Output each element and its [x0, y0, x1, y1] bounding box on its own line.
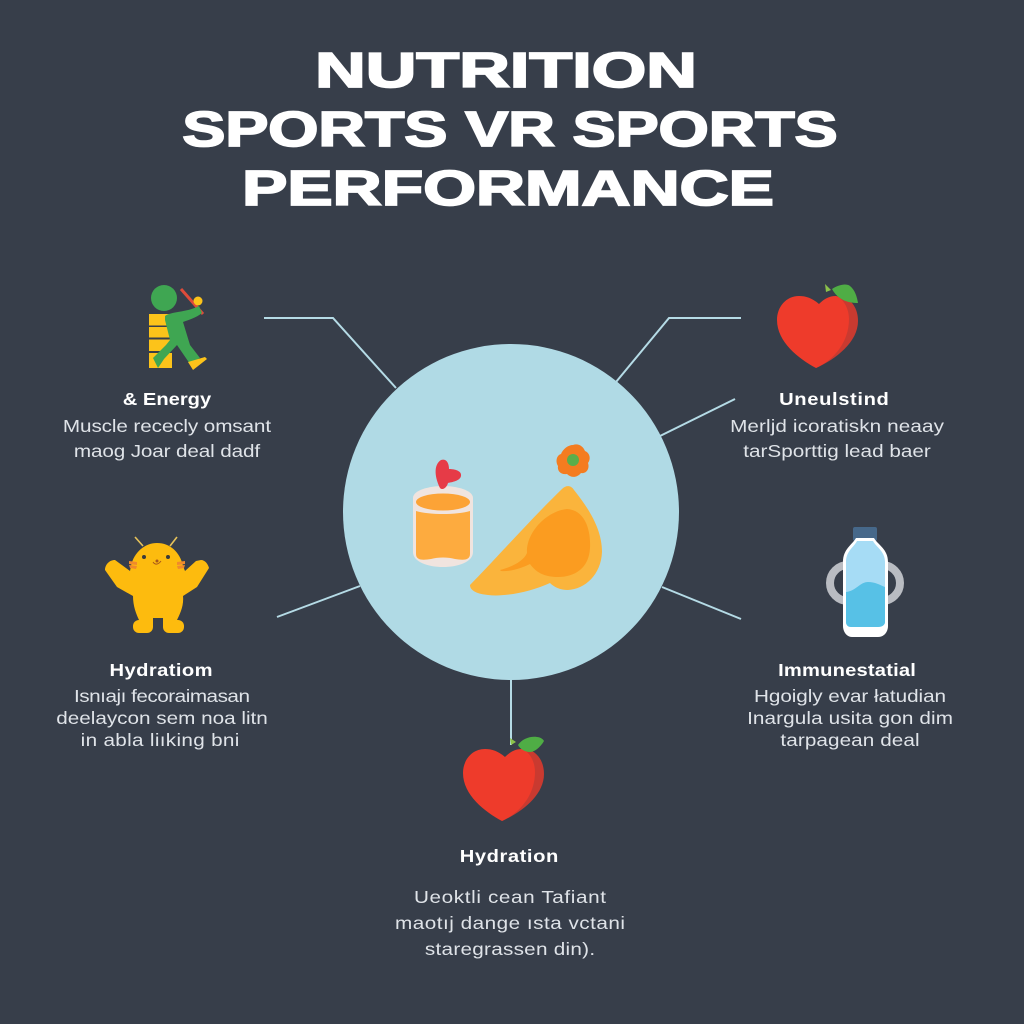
heading: Hydratiom [109, 661, 213, 681]
text block [63, 416, 272, 462]
text block: deelaycon sem noa litn [56, 708, 268, 729]
text block: in abla liıking bni [81, 730, 239, 751]
text block: staregrassen din). [425, 939, 595, 960]
text block: Hgoigly evar łatudian [754, 686, 946, 707]
icon: runner [149, 285, 207, 370]
icon: orange fruit slice [470, 486, 602, 595]
panel: middle right immunity [747, 527, 953, 751]
icon: red garnish [436, 460, 461, 489]
heading: Immunestatial [778, 661, 916, 681]
text block: Muscle rececly omsant [63, 416, 272, 437]
icon: water bottle [830, 527, 900, 637]
text block: maotıj dange ısta vctani [395, 913, 625, 934]
text block: tarpagean deal [780, 730, 920, 751]
text block: Isnıajı fecoraimasan [74, 686, 250, 707]
text block [730, 416, 944, 462]
text block: tarSporttig lead baer [743, 441, 931, 462]
icon: apple heart [463, 737, 544, 821]
title [182, 42, 838, 216]
icon: yellow mascot [105, 537, 209, 633]
connector lines [264, 318, 741, 745]
text block: maog Joar deal dadf [74, 441, 261, 462]
icon: apple heart [777, 284, 858, 368]
text block: Merljd icoratiskn neaay [730, 416, 944, 437]
text block [56, 686, 268, 751]
text block [747, 686, 953, 751]
icon: orange flower [557, 444, 590, 477]
heading: Hydration [460, 847, 558, 867]
heading: Uneulstind [779, 390, 889, 410]
heading: & Energy [123, 390, 212, 410]
text block: Inargula usita gon dim [747, 708, 953, 729]
text block [395, 887, 625, 960]
panel: top left energy [63, 285, 272, 462]
title: SPORTS VR SPORTS [182, 102, 838, 157]
title: NUTRITION [315, 42, 697, 98]
title: PERFORMANCE [242, 160, 774, 216]
panel: top right [730, 284, 944, 462]
text block: Ueoktli cean Tafiant [414, 887, 607, 908]
icon: juice glass [413, 460, 473, 567]
panel: middle left hydration [56, 537, 268, 751]
central circle [343, 344, 679, 680]
panel: bottom hydration [395, 737, 625, 960]
